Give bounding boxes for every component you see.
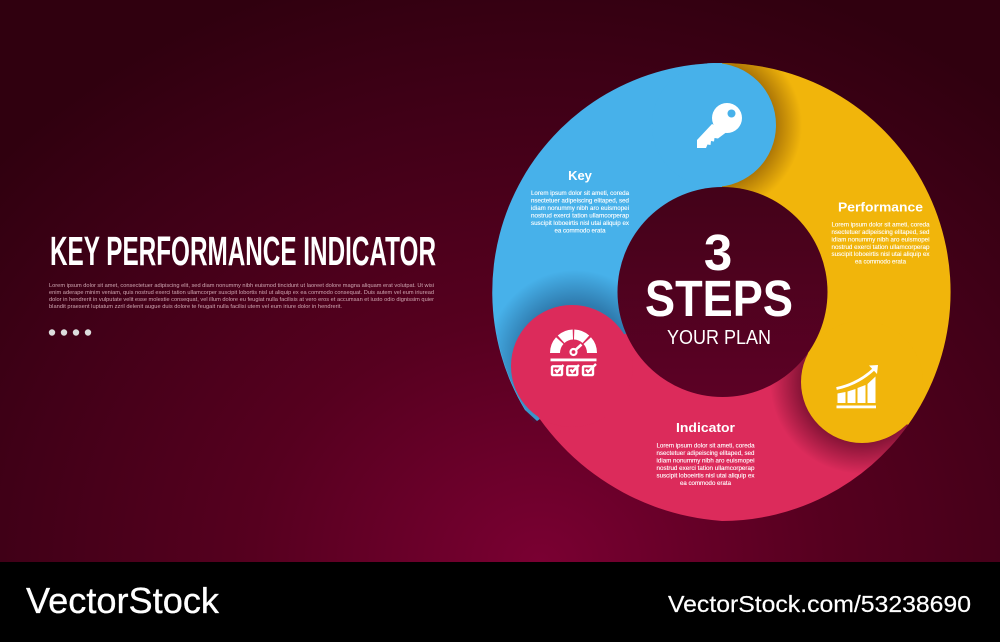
body: key: nostrud exerci tation ullamcorperap bbox=[531, 212, 629, 219]
body: indicator: ea commodo erata bbox=[680, 480, 731, 487]
heading: key: Key bbox=[568, 168, 593, 183]
body: key: ea commodo erata bbox=[554, 227, 606, 234]
body: indicator: nsectetuer adipeiscing elitaped, sed bbox=[656, 450, 755, 457]
intro paragraph: dolor in hendrerit in vulputate velit esse molestie consequat, vel illum dolore eu feugiat nulla facilisis at vero eros et accumsan et iusto odio dignissim quier bbox=[49, 297, 434, 303]
body: indicator: idiam nonummy nibh aro euismopei bbox=[656, 457, 754, 464]
icon: gauge with checkboxes bbox=[550, 334, 596, 375]
intro paragraph bbox=[49, 283, 434, 310]
body: key bbox=[531, 190, 630, 234]
panel: performance segment lobe bbox=[801, 321, 923, 443]
body: key: idiam nonummy nibh aro euismopei bbox=[531, 205, 629, 212]
body: key: nsectetuer adipeiscing elitaped, sed bbox=[531, 198, 629, 204]
text block: performance bbox=[832, 200, 930, 266]
body: performance: suscipit loboeirtis nisl utai aliquip ex bbox=[832, 251, 930, 258]
body: indicator bbox=[656, 442, 755, 487]
intro paragraph: blandit praesent luptatum zzril delenit augue duis dolore te feugait nulla facilisi utem vel eum iriure dolor in hendrerit. bbox=[49, 304, 342, 310]
text block: key bbox=[531, 168, 630, 234]
center number: 3 bbox=[704, 224, 732, 281]
body: key: Lorem ipsum dolor sit ameti, coreda bbox=[531, 190, 629, 197]
footer bar bbox=[0, 562, 1000, 642]
body: performance: ea commodo erata bbox=[855, 259, 906, 266]
body: performance: nsectetuer adipeiscing elitaped, sed bbox=[832, 229, 930, 236]
icon: growth chart bbox=[836, 365, 878, 408]
body: performance: Lorem ipsum dolor sit ameti, coreda bbox=[832, 222, 930, 228]
body: indicator: Lorem ipsum dolor sit ameti, coreda bbox=[656, 442, 755, 450]
text block: indicator bbox=[656, 420, 755, 487]
heading: performance: Performance bbox=[838, 200, 923, 214]
body: performance: idiam nonummy nibh aro euismopei bbox=[832, 236, 930, 243]
center circle bbox=[618, 187, 828, 397]
footer url: VectorStock.com/53238690 bbox=[668, 591, 971, 617]
pagination dots bbox=[49, 329, 91, 336]
body: performance bbox=[832, 222, 930, 266]
footer logo: VectorStock bbox=[26, 580, 220, 621]
panel: indicator segment bbox=[511, 305, 908, 521]
body: indicator: nostrud exerci tation ullamcorperap bbox=[656, 465, 755, 472]
icon: key bbox=[697, 103, 742, 148]
body: indicator: suscipit loboeirtis nisl utai aliquip ex bbox=[656, 472, 755, 479]
intro paragraph: enim aderape minim veniam, quis nostrud exerci tation ullamcorper suscipit lobortis nisl ut aliquip ex ea commodo consequat. Duis autem vel eum iriuread bbox=[49, 290, 434, 296]
title: KEY PERFORMANCE INDICATOR bbox=[50, 228, 436, 274]
intro paragraph: Lorem ipsum dolor sit amet, consectetuer adipiscing elit, sed diam nonummy nibh euismod tincidunt ut laoreet dolore magna aliquam erat volutpat. Ut wisi bbox=[49, 283, 434, 289]
center subheading: YOUR PLAN bbox=[667, 327, 771, 349]
body: key: suscipit loboeirtis nisl utai aliquip ex bbox=[531, 220, 630, 227]
body: performance: nostrud exerci tation ullamcorperap bbox=[832, 244, 930, 251]
center heading: STEPS bbox=[645, 270, 793, 327]
panel: performance segment body bbox=[722, 63, 951, 425]
panel: key segment bbox=[487, 63, 776, 446]
heading: indicator: Indicator bbox=[676, 420, 735, 435]
